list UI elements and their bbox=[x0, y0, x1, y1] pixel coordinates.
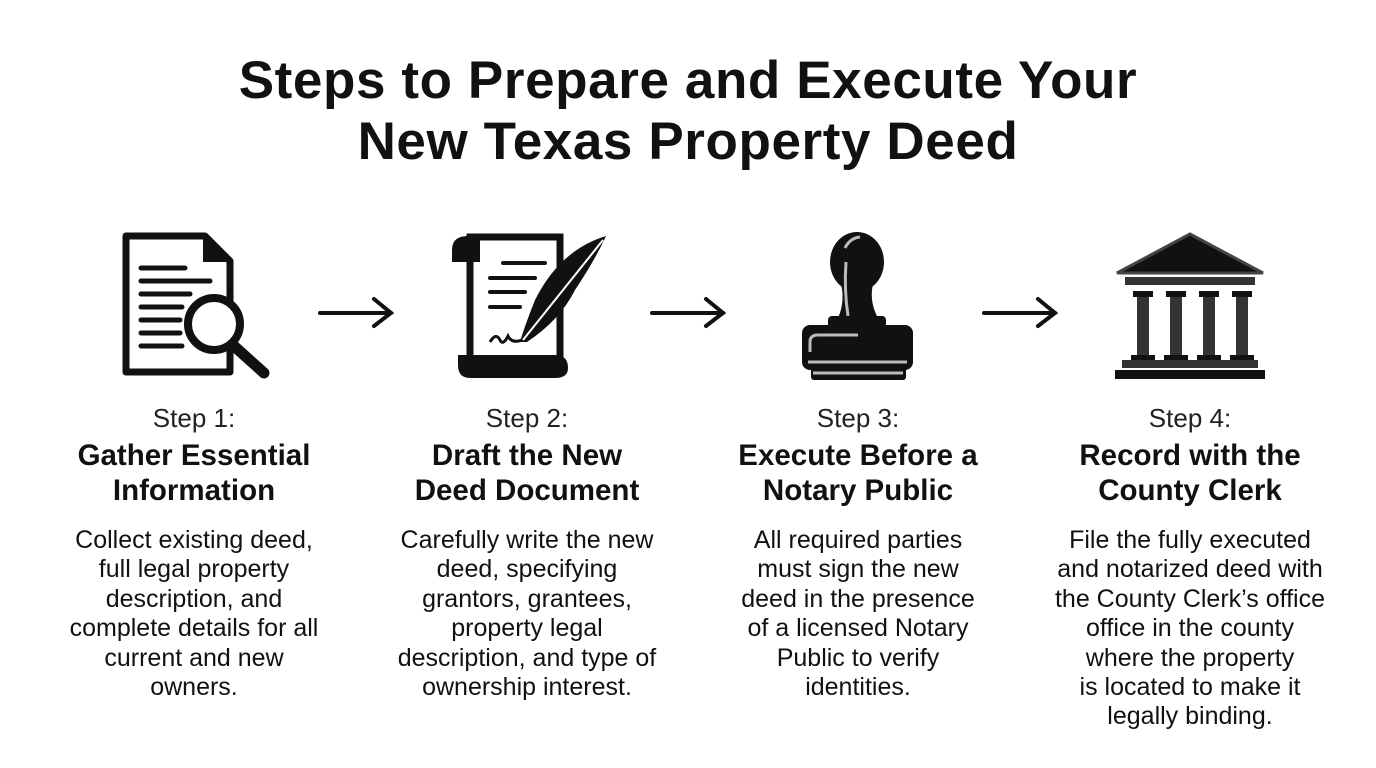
step 2: Draft the New bbox=[432, 439, 622, 472]
step 4: Step 4: bbox=[1149, 403, 1231, 433]
step 1: full legal property bbox=[99, 555, 289, 583]
step 3: Step 3: bbox=[817, 403, 899, 433]
step 2: description, and type of bbox=[398, 644, 656, 672]
step 4: File the fully executed bbox=[1069, 526, 1311, 554]
step 4: is located to make it bbox=[1080, 673, 1300, 701]
step 4: where the property bbox=[1086, 644, 1294, 672]
title bbox=[239, 51, 1137, 171]
icon: notary stamp bbox=[802, 232, 913, 380]
step 1: Gather Essential bbox=[78, 439, 310, 472]
step 3: must sign the new bbox=[757, 555, 959, 583]
step 2: Step 2: bbox=[486, 403, 568, 433]
step 1: owners. bbox=[150, 673, 238, 701]
step 3 bbox=[738, 403, 978, 701]
step 2: deed, specifying bbox=[437, 555, 617, 583]
step 3: of a licensed Notary bbox=[748, 614, 968, 642]
step 4: County Clerk bbox=[1098, 474, 1282, 507]
arrow 1 bbox=[320, 299, 391, 326]
step 2 bbox=[398, 403, 656, 701]
step 1 bbox=[70, 403, 318, 701]
step 1: description, and bbox=[106, 585, 282, 613]
title: Steps to Prepare and Execute Your bbox=[239, 51, 1137, 110]
step 3: Execute Before a bbox=[738, 439, 978, 472]
arrow 2 bbox=[652, 299, 723, 326]
step 1: Collect existing deed, bbox=[75, 526, 313, 554]
step 4 bbox=[1055, 403, 1325, 730]
icon: courthouse bbox=[1115, 234, 1265, 379]
step 1: Step 1: bbox=[153, 403, 235, 433]
step 3: identities. bbox=[805, 673, 911, 701]
step 3: Notary Public bbox=[763, 474, 953, 507]
step 1: complete details for all bbox=[70, 614, 318, 642]
step 1: current and new bbox=[104, 644, 284, 672]
step 2: Deed Document bbox=[415, 474, 639, 507]
step 2: Carefully write the new bbox=[401, 526, 653, 554]
title: New Texas Property Deed bbox=[358, 112, 1018, 171]
step 4: Record with the bbox=[1079, 439, 1301, 472]
step 3: deed in the presence bbox=[741, 585, 975, 613]
step 3: Public to verify bbox=[777, 644, 939, 672]
step 2: property legal bbox=[451, 614, 603, 642]
step 2: grantors, grantees, bbox=[422, 585, 632, 613]
icon: scroll with quill bbox=[452, 236, 606, 378]
step 1: Information bbox=[113, 474, 275, 507]
step 4: and notarized deed with bbox=[1057, 555, 1323, 583]
step 2: ownership interest. bbox=[422, 673, 632, 701]
step 4: office in the county bbox=[1086, 614, 1294, 642]
step 3: All required parties bbox=[754, 526, 962, 554]
step 4: the County Clerk’s office bbox=[1055, 585, 1325, 613]
step 4: legally binding. bbox=[1107, 702, 1273, 730]
icon: document with magnifier bbox=[126, 236, 264, 373]
arrow 3 bbox=[984, 299, 1055, 326]
